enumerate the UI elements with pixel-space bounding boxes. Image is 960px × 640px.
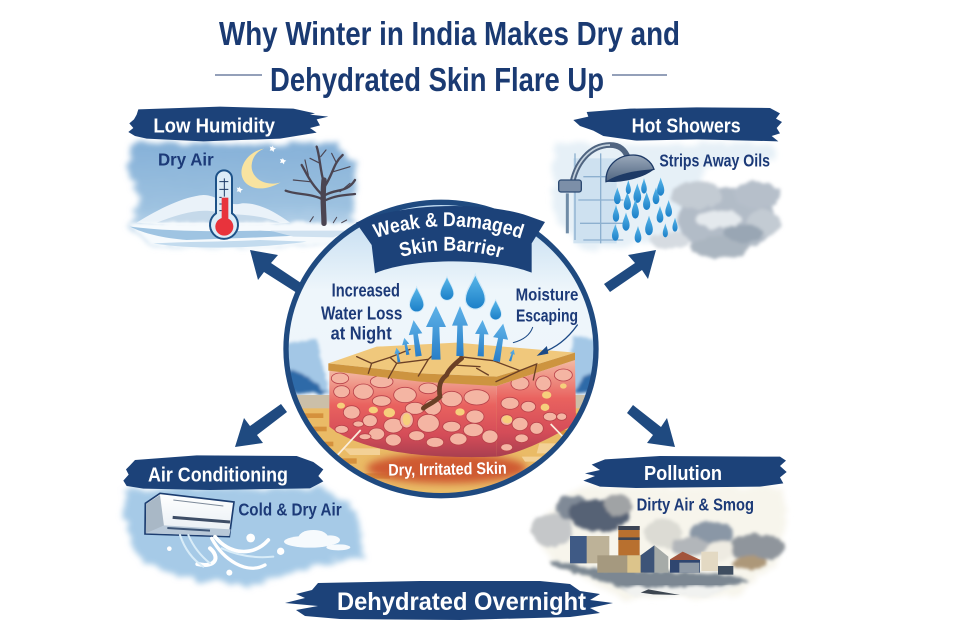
bottom banner: dehydrated overnight bbox=[285, 581, 613, 620]
bare tree bbox=[286, 147, 355, 223]
skin front face bbox=[329, 371, 497, 457]
moon bbox=[241, 149, 281, 188]
label: moisture escaping: Escaping bbox=[516, 306, 578, 326]
steam cloud bbox=[650, 181, 780, 257]
circle background bbox=[286, 202, 596, 496]
hill shading bbox=[157, 211, 280, 223]
brick ground pattern bbox=[304, 413, 578, 479]
label: dry air: Dry Air bbox=[158, 150, 214, 170]
polluted ground bbox=[550, 561, 750, 597]
blue side washes bbox=[283, 337, 600, 393]
yellow cells bbox=[337, 383, 567, 425]
red irritated ground bbox=[367, 453, 527, 483]
small cloud bbox=[284, 530, 350, 550]
arrow: air conditioning bbox=[235, 404, 287, 447]
heading banner bbox=[123, 455, 323, 490]
panel: hot showers bbox=[553, 107, 782, 257]
skin right face bbox=[497, 360, 576, 457]
snow puffs bbox=[167, 534, 284, 576]
infographic canvas bbox=[119, 21, 787, 620]
title: Dehydrated Skin Flare Up bbox=[270, 61, 604, 98]
shower head bbox=[606, 155, 654, 182]
ground bbox=[302, 408, 580, 493]
arrow: low humidity bbox=[250, 250, 304, 293]
heading banner: Air Conditioning bbox=[148, 464, 288, 486]
panel: weak and damaged skin barrier bbox=[283, 200, 599, 498]
title: Why Winter in India Makes Dry and bbox=[219, 15, 680, 52]
label: increased water loss at night: Water Loss bbox=[321, 302, 402, 323]
sky wash bbox=[127, 143, 357, 247]
pointer arrow bbox=[513, 325, 577, 355]
air conditioner unit bbox=[145, 493, 234, 537]
skin top rim bbox=[328, 353, 575, 386]
pointer lines bbox=[337, 424, 578, 456]
blue wash bbox=[123, 488, 363, 587]
panel: pollution bbox=[532, 456, 787, 598]
panel: low humidity bbox=[127, 107, 360, 248]
heading banner bbox=[583, 456, 787, 488]
label: dry irritated skin: Dry, Irritated Skin bbox=[388, 459, 507, 480]
heading banner: Low Humidity bbox=[153, 115, 275, 138]
curved banner bbox=[356, 206, 545, 274]
window tiles bbox=[573, 153, 630, 243]
label: cold and dry air: Cold & Dry Air bbox=[238, 499, 342, 519]
water drops bbox=[612, 177, 678, 243]
label: increased water loss at night bbox=[321, 280, 402, 343]
water droplets bbox=[409, 274, 501, 320]
heading banner bbox=[128, 107, 328, 141]
title bbox=[215, 15, 680, 98]
label: increased water loss at night: at Night bbox=[331, 322, 392, 343]
curved banner: Skin Barrier bbox=[400, 236, 504, 258]
arrow: hot showers bbox=[604, 250, 656, 292]
stars bbox=[237, 146, 286, 193]
arrow: pollution bbox=[627, 405, 675, 447]
snow ground bbox=[127, 223, 360, 248]
heading banner: Pollution bbox=[644, 462, 722, 485]
label: moisture escaping bbox=[516, 288, 578, 325]
label: dirty air and smog: Dirty Air & Smog bbox=[637, 495, 754, 515]
label: increased water loss at night: Increased bbox=[332, 280, 400, 301]
escaping moisture arrows bbox=[393, 306, 516, 363]
panel: air conditioning bbox=[123, 455, 363, 587]
heading banner bbox=[573, 107, 782, 141]
heading banner: Hot Showers bbox=[632, 115, 741, 138]
label: moisture escaping: Moisture bbox=[516, 285, 578, 305]
snowy hills bbox=[137, 195, 290, 226]
skin cells bbox=[331, 369, 572, 451]
curved banner: Weak & Damaged bbox=[372, 212, 524, 238]
cold air swirls bbox=[180, 535, 273, 568]
skin top surface bbox=[328, 343, 575, 377]
bottom banner: dehydrated overnight: Dehydrated Overnight bbox=[337, 588, 587, 616]
shower arm bbox=[559, 145, 628, 233]
pale wash bbox=[553, 143, 777, 250]
thermometer bbox=[210, 170, 238, 239]
loose skin flakes bbox=[343, 443, 567, 462]
smoke clouds bbox=[532, 494, 785, 569]
surface cracks bbox=[357, 349, 537, 408]
label: strips away oils: Strips Away Oils bbox=[659, 151, 770, 171]
circle scene bbox=[280, 274, 600, 498]
factory buildings bbox=[570, 526, 733, 575]
circle outline bbox=[286, 202, 596, 496]
cream wash bbox=[533, 487, 787, 598]
